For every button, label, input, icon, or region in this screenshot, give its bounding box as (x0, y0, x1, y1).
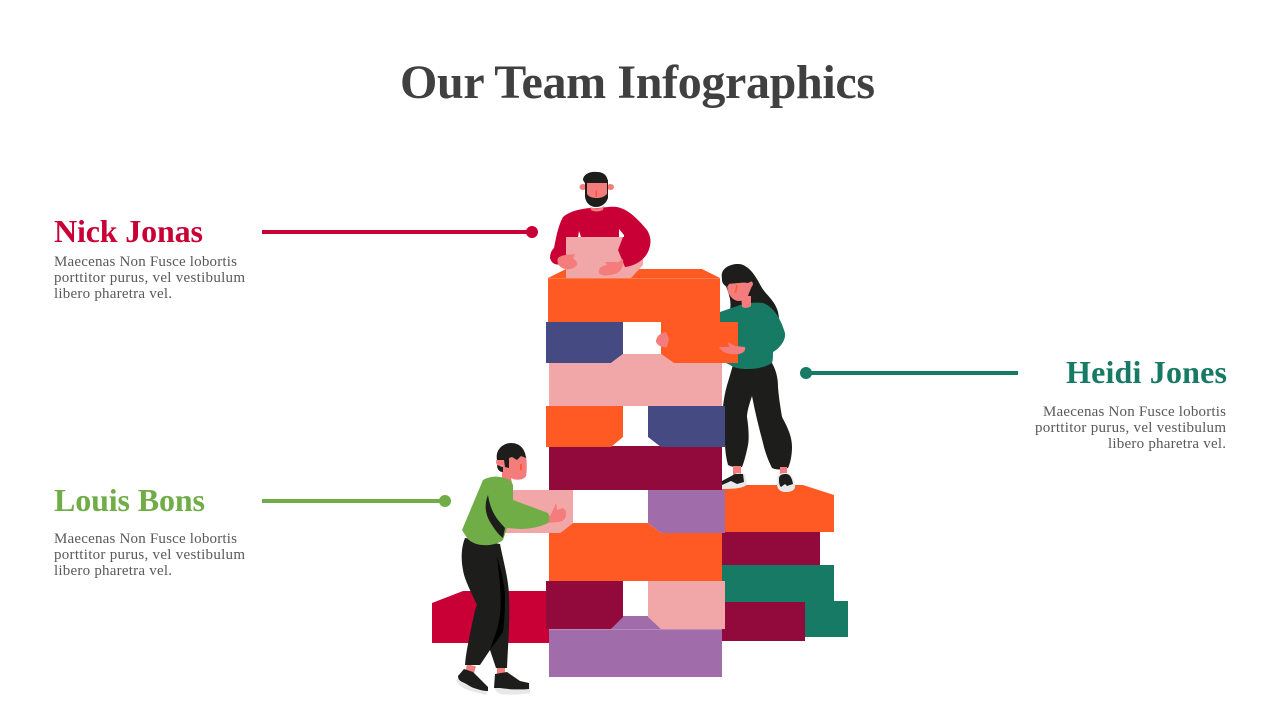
name: Louis Bons: Louis Bons (54, 482, 205, 518)
description: Nick Jonas: Maecenas Non Fusce lobortis (54, 254, 237, 270)
name: Nick Jonas: Nick Jonas (54, 213, 203, 249)
description: Heidi Jones (1035, 404, 1226, 452)
navy block, row 2 (546, 322, 623, 363)
woman sweater (720, 303, 785, 369)
crimson base block (432, 591, 552, 643)
connector: Louis Bons (262, 495, 451, 507)
pale block, row 8 (648, 581, 725, 629)
pale block, row 3 (549, 354, 722, 406)
pale block carried by Louis (500, 490, 573, 533)
description: Louis Bons: Maecenas Non Fusce lobortis (54, 531, 237, 547)
woman trousers (723, 363, 792, 470)
block stack illustration (432, 172, 848, 677)
woman feet (722, 466, 795, 492)
man neck (590, 206, 604, 212)
purple block, row 6 (648, 490, 725, 533)
navy block, row 4 (648, 406, 725, 447)
man: Nick (550, 172, 650, 278)
panel: Nick Jonas (54, 213, 538, 302)
description: Heidi Jones: porttitor purus, vel vestibulum (1035, 420, 1226, 436)
orange block, row 4 (546, 406, 623, 447)
description: Nick Jonas: libero pharetra vel. (54, 286, 172, 302)
description: Louis Bons (54, 531, 245, 579)
panel: Heidi Jones (800, 354, 1227, 452)
maroon block, row 5 (549, 446, 722, 490)
panel: Louis Bons (54, 482, 451, 579)
connector: Heidi Jones (800, 367, 1018, 379)
description: Louis Bons: porttitor purus, vel vestibulum (54, 547, 245, 563)
maroon block, row 8 (546, 581, 623, 629)
Louis hand (549, 503, 566, 523)
man pale box back (566, 237, 643, 278)
Louis head (496, 443, 527, 483)
description: Louis Bons: libero pharetra vel. (54, 563, 172, 579)
woman neck and face (722, 264, 753, 308)
connector: Nick Jonas (262, 226, 538, 238)
title: Our Team Infographics (400, 56, 875, 109)
description: Heidi Jones: Maecenas Non Fusce lobortis (1043, 404, 1226, 420)
purple bottom block (549, 616, 722, 677)
man pale box front (566, 237, 631, 278)
man: Louis (456, 443, 566, 695)
description: Heidi Jones: libero pharetra vel. (1108, 436, 1226, 452)
Louis feet (456, 664, 530, 695)
name: Heidi Jones: Heidi Jones (1066, 354, 1227, 390)
description: Nick Jonas (54, 254, 245, 302)
woman: Heidi, back layer (720, 264, 795, 492)
carried orange block (661, 322, 738, 363)
orange big block, row 7 (549, 523, 722, 581)
man hands (557, 254, 577, 269)
description: Nick Jonas: porttitor purus, vel vestibulum (54, 270, 245, 286)
man sweater (550, 207, 650, 267)
Louis sweater (462, 477, 551, 545)
right stack blocks (722, 485, 848, 641)
Louis trousers (462, 538, 509, 668)
top orange block (548, 269, 720, 322)
woman hands (656, 332, 745, 354)
